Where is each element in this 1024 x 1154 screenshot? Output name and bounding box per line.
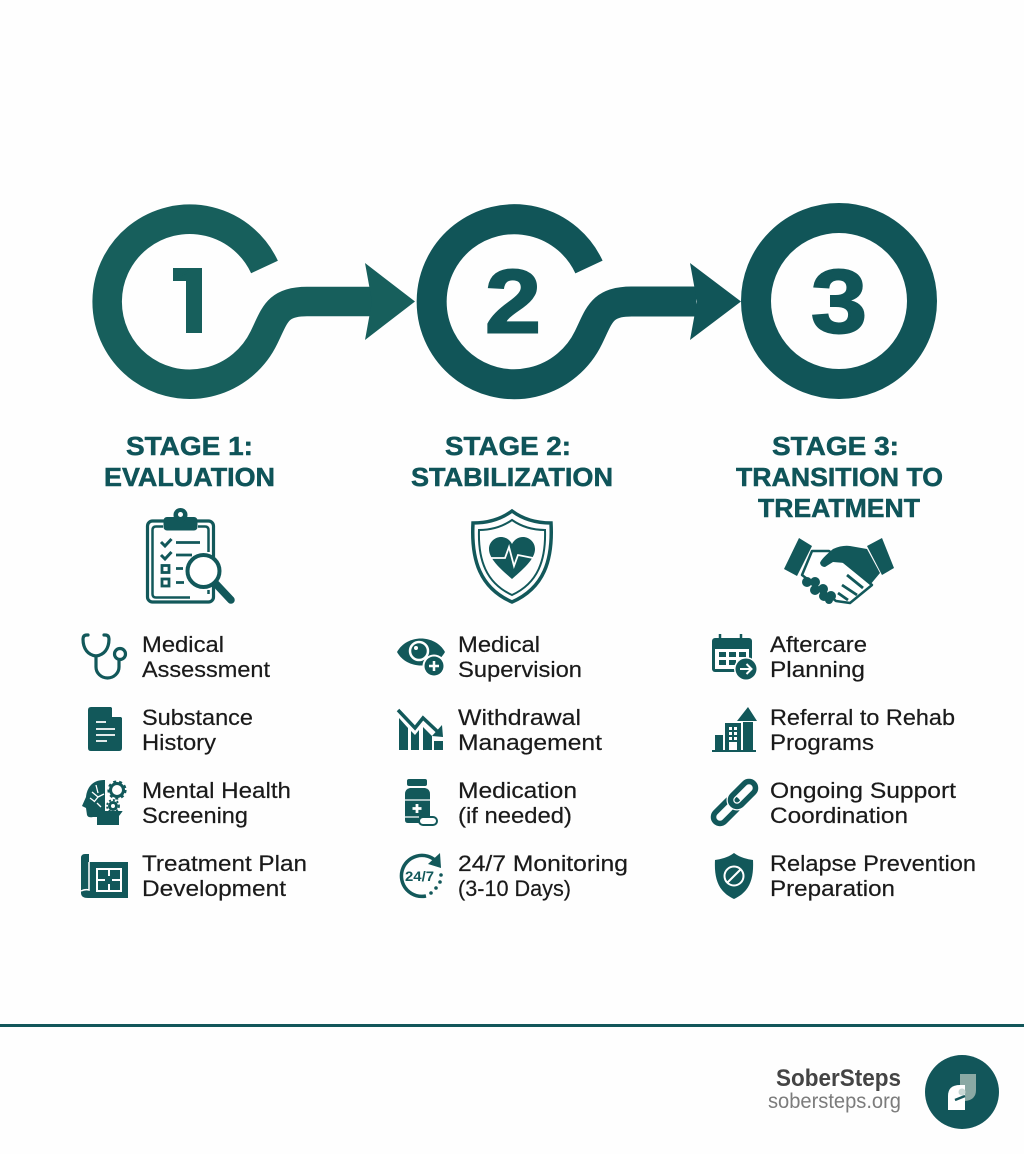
icon: 24/7 clock arrow bbox=[401, 853, 443, 896]
item: ongoing support coordination: Ongoing Support bbox=[770, 778, 956, 803]
icon: handshake bbox=[784, 538, 894, 604]
item: relapse prevention preparation bbox=[715, 851, 976, 901]
item: referral to rehab programs: Programs bbox=[770, 730, 874, 755]
item: referral to rehab programs: Referral to Rehab bbox=[770, 705, 955, 730]
item: mental health screening: Screening bbox=[142, 803, 248, 828]
item: substance history: Substance bbox=[142, 705, 253, 730]
stage 1 number ring and arrow bbox=[107, 219, 415, 384]
icon: head with gears bbox=[82, 778, 129, 825]
heading: stage 1 bbox=[104, 431, 275, 492]
item: relapse prevention preparation: Relapse Prevention bbox=[770, 851, 976, 876]
item: mental health screening: Mental Health bbox=[142, 778, 291, 803]
item: withdrawal management: Management bbox=[458, 730, 602, 755]
icon: stethoscope bbox=[83, 635, 126, 678]
item: 24/7 monitoring bbox=[401, 851, 628, 901]
icon: document bbox=[88, 707, 122, 751]
icon: chain link bbox=[711, 779, 758, 826]
panel: stage 3 transition to treatment bbox=[711, 431, 976, 901]
icon: 24/7 clock arrow: 24/7 bbox=[405, 868, 434, 884]
footer brand name: SoberSteps bbox=[776, 1065, 901, 1092]
item: relapse prevention preparation: Preparation bbox=[770, 876, 895, 901]
panel: stage 1 evaluation bbox=[81, 431, 307, 901]
stage 1 number ring and arrow: 1 bbox=[163, 253, 223, 353]
item: ongoing support coordination: Coordination bbox=[770, 803, 908, 828]
heading: stage 1: STAGE 1: bbox=[126, 431, 253, 461]
heading: stage 1: EVALUATION bbox=[104, 462, 275, 492]
heading: stage 3: TRANSITION TO bbox=[736, 462, 943, 492]
item: ongoing support coordination bbox=[711, 778, 956, 828]
footer brand name bbox=[768, 1065, 901, 1113]
stage 2 number ring and arrow bbox=[432, 219, 741, 384]
item: aftercare planning: Aftercare bbox=[770, 632, 867, 657]
heading: stage 3 bbox=[736, 431, 943, 523]
item: treatment plan development: Development bbox=[142, 876, 286, 901]
item: medical assessment bbox=[83, 632, 270, 682]
icon: calendar with arrow bbox=[712, 634, 758, 681]
item: medical assessment: Assessment bbox=[142, 657, 270, 682]
item: medical assessment: Medical bbox=[142, 632, 224, 657]
heading: stage 2 bbox=[411, 431, 613, 492]
item: medication: Medication bbox=[458, 778, 577, 803]
item: 24/7 monitoring: (3-10 Days) bbox=[458, 876, 571, 901]
icon: clipboard with magnifier bbox=[148, 508, 231, 602]
stage 2 number ring and arrow: 2 bbox=[485, 252, 541, 352]
stage 3 number ring: 3 bbox=[811, 252, 867, 352]
footer logo bbox=[925, 1055, 999, 1129]
item: referral to rehab programs bbox=[712, 705, 955, 755]
icon: pill bottle bbox=[405, 779, 437, 825]
item: medical supervision: Supervision bbox=[458, 657, 582, 682]
item: medication bbox=[405, 778, 577, 828]
icon: shield with ban bbox=[715, 853, 753, 899]
item: withdrawal management: Withdrawal bbox=[458, 705, 581, 730]
icon: declining bar chart bbox=[398, 710, 443, 750]
heading: stage 3: TREATMENT bbox=[758, 493, 920, 523]
icon: shield with heart bbox=[473, 511, 551, 602]
heading: stage 2: STABILIZATION bbox=[411, 462, 613, 492]
heading: stage 3: STAGE 3: bbox=[772, 431, 899, 461]
item: withdrawal management bbox=[398, 705, 602, 755]
item: substance history: History bbox=[142, 730, 216, 755]
item: medical supervision: Medical bbox=[458, 632, 540, 657]
item: medication: (if needed) bbox=[458, 803, 572, 828]
item: treatment plan development: Treatment Plan bbox=[142, 851, 307, 876]
item: medical supervision bbox=[397, 632, 582, 682]
stage 3 number ring bbox=[756, 218, 922, 384]
icon: building with up arrow bbox=[712, 707, 757, 752]
item: substance history bbox=[88, 705, 253, 755]
footer brand name: sobersteps.org bbox=[768, 1090, 901, 1113]
item: mental health screening bbox=[82, 778, 291, 828]
icon: eye with plus bbox=[397, 638, 446, 678]
panel: stage 2 stabilization bbox=[397, 431, 628, 901]
heading: stage 2: STAGE 2: bbox=[445, 431, 571, 461]
item: aftercare planning bbox=[712, 632, 867, 682]
item: aftercare planning: Planning bbox=[770, 657, 865, 682]
item: 24/7 monitoring: 24/7 Monitoring bbox=[458, 851, 628, 876]
item: treatment plan development bbox=[81, 851, 307, 901]
icon: blueprint bbox=[81, 854, 128, 898]
